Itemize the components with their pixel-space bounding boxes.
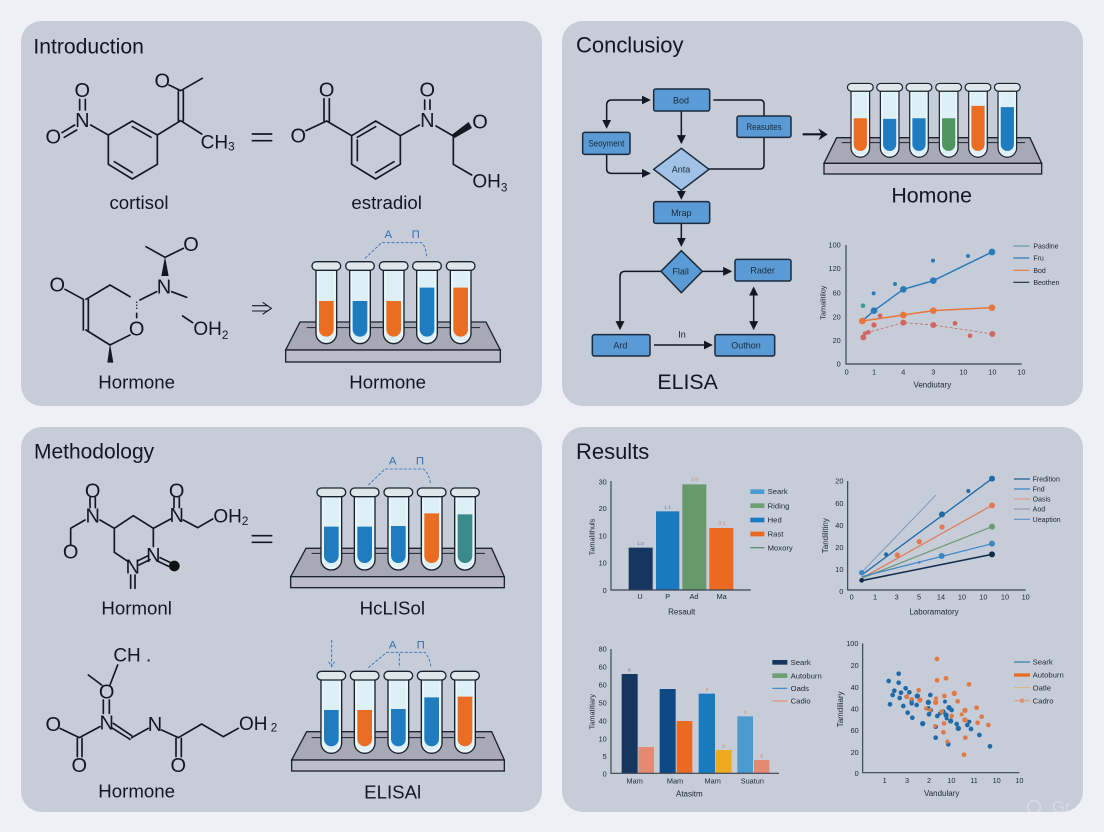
line chart: laboratory: 10 xyxy=(1022,593,1030,602)
dashed annotation: A xyxy=(389,455,397,467)
bar chart: results: 1.0 xyxy=(637,541,644,547)
molecule: estradiol: OH xyxy=(472,171,501,192)
line chart: 20 xyxy=(833,312,841,321)
heading: Introduction: Introduction xyxy=(33,35,144,58)
molecule: hormone: O xyxy=(46,714,61,736)
scatter plot: 20 xyxy=(851,661,859,670)
line chart: laboratory: Tandilitiny xyxy=(821,518,830,553)
scatter plot: 60 xyxy=(851,726,859,735)
dashed annotation: Π xyxy=(416,455,424,467)
bar chart: results: 1.1 xyxy=(664,504,671,510)
molecule: cortisol xyxy=(46,71,235,179)
grouped bar chart: 60 xyxy=(599,663,607,672)
grouped bar chart: Autoburn xyxy=(791,671,822,680)
bar chart: results: Rast xyxy=(768,530,784,539)
bar chart: results: Hed xyxy=(768,516,782,525)
dashed annotation: A xyxy=(385,229,393,241)
label: estradiol: estradiol xyxy=(351,192,422,213)
flowchart: Bod xyxy=(673,95,689,105)
flowchart: Ard xyxy=(613,341,627,351)
bar chart: results xyxy=(587,477,793,616)
scatter plot: Oatle xyxy=(1033,684,1051,693)
molecule: hormonl xyxy=(63,481,248,588)
line chart: laboratory: 20 xyxy=(835,477,843,486)
bar chart: results: U xyxy=(637,592,643,601)
flowchart xyxy=(583,89,791,356)
flowchart: Anta xyxy=(672,164,690,174)
line chart xyxy=(818,241,1059,390)
bar chart: results: Ma xyxy=(717,592,728,601)
scatter plot: 100 xyxy=(846,639,858,648)
molecule: hormone: N xyxy=(99,713,114,735)
molecule: hormone: O xyxy=(99,682,114,704)
grouped bar chart: 50 xyxy=(599,698,607,707)
line chart: laboratory: 3 xyxy=(895,593,899,602)
grouped bar chart: 5 xyxy=(603,752,607,761)
label: ELISA: ELISA xyxy=(657,370,719,394)
molecule: hormonl: OH xyxy=(213,506,242,527)
bar chart: results: 0 xyxy=(603,586,607,595)
scatter plot: Seark xyxy=(1033,658,1053,667)
label: hormone left: Hormone xyxy=(98,371,175,392)
panel: results xyxy=(562,427,1083,817)
line chart: Fru xyxy=(1033,256,1044,263)
flowchart: In xyxy=(678,329,686,339)
grouped bar chart: Suatun xyxy=(741,777,764,786)
molecule: hormonl: 2 xyxy=(242,515,248,528)
flowchart: Mrap xyxy=(671,208,692,218)
scatter plot: 3 xyxy=(905,776,909,785)
grouped bar chart: 60 xyxy=(599,681,607,690)
label: cortisol: cortisol xyxy=(109,192,169,213)
grouped bar chart: Seark xyxy=(791,658,811,667)
scatter plot: 20 xyxy=(851,748,859,757)
line chart: Beothen xyxy=(1033,280,1059,287)
line chart: laboratory: 40 xyxy=(835,521,843,530)
bar chart: results: P xyxy=(665,592,670,601)
label: hormone right: Hormone xyxy=(349,371,426,392)
label: ELISAl: ELISAl xyxy=(364,781,421,802)
arrow: double xyxy=(252,302,271,314)
molecule: hormonl: N xyxy=(125,557,140,579)
grouped bar chart: 40 xyxy=(599,716,607,725)
molecule: hormone: N xyxy=(157,277,171,299)
scatter plot: 11 xyxy=(970,776,978,785)
scatter plot: 2 xyxy=(927,776,931,785)
equals sign xyxy=(252,134,272,141)
molecule: estradiol: O xyxy=(319,79,334,101)
molecule: hormonl: N xyxy=(85,506,100,528)
molecule: cortisol: O xyxy=(75,80,90,102)
dashed annotation with arrow: A xyxy=(389,639,397,651)
line chart: 0 xyxy=(837,360,841,369)
panel: methodology xyxy=(21,427,542,812)
dashed annotation with arrow: Π xyxy=(417,639,425,651)
molecule: hormone: O xyxy=(183,234,199,256)
grouped bar chart: Mam xyxy=(667,777,683,786)
line chart: laboratory: 10 xyxy=(958,593,966,602)
line chart: 120 xyxy=(829,264,841,273)
line chart: laboratory: 0 xyxy=(839,587,843,596)
line chart: laboratory: 60 xyxy=(835,499,843,508)
flowchart: Rader xyxy=(750,266,775,276)
scatter plot: Vandulary xyxy=(924,789,959,798)
molecule: hormonl: O xyxy=(85,481,100,503)
bar chart: results: 30 xyxy=(599,477,607,486)
line chart: laboratory: 0 xyxy=(850,593,854,602)
label: Hormonl: Hormonl xyxy=(101,597,172,618)
line chart: 3 xyxy=(931,368,935,377)
grouped bar chart: 9 xyxy=(744,710,747,716)
line chart: 4 xyxy=(901,368,905,377)
grouped bar chart: Oads xyxy=(791,684,809,693)
molecule: hormone: CH . xyxy=(113,646,151,667)
test tube rack xyxy=(824,83,1042,174)
flowchart: Flail xyxy=(672,266,689,276)
test tube rack top xyxy=(291,488,504,588)
grouped bar chart: 6 xyxy=(706,687,709,693)
line chart: laboratory: 14 xyxy=(937,593,945,602)
line chart: laboratory: Laboramatory xyxy=(909,607,959,616)
scatter plot xyxy=(836,639,1064,798)
line chart: laboratory: Ueaption xyxy=(1033,517,1061,524)
dashed annotation with arrow xyxy=(329,639,431,668)
molecule: estradiol: 3 xyxy=(501,181,507,194)
grouped bar chart: 0 xyxy=(603,770,607,779)
molecule: cortisol: 3 xyxy=(228,140,235,153)
molecule: hormone: O xyxy=(72,755,87,777)
grouped bar chart: 8 xyxy=(722,743,725,749)
heading: Conclusioy: Conclusioy xyxy=(576,33,684,58)
line chart: laboratory xyxy=(821,476,1061,616)
molecule: estradiol: N xyxy=(420,110,435,132)
line chart: laboratory: Oasis xyxy=(1033,497,1051,504)
line chart: laboratory: 10 xyxy=(1001,593,1009,602)
line chart: laboratory: 1 xyxy=(873,593,877,602)
heading: Methodology: Methodology xyxy=(34,440,155,463)
scatter plot: Autoburn xyxy=(1033,671,1064,680)
flowchart: Seoyment xyxy=(588,138,625,148)
scatter plot: Cadro xyxy=(1033,696,1054,705)
line chart: 10 xyxy=(1017,368,1025,377)
flowchart: Outhon xyxy=(731,341,761,351)
molecule: hormone xyxy=(46,646,277,777)
bar chart: results: Tamalithuls xyxy=(587,518,596,555)
molecule: hormone: 2 xyxy=(267,721,277,734)
label: Hormone: Hormone xyxy=(98,780,175,801)
grouped bar chart: Mam xyxy=(627,777,643,786)
grouped bar chart: Cadio xyxy=(791,697,811,706)
line chart: 100 xyxy=(829,241,841,250)
molecule: estradiol xyxy=(291,79,507,194)
test tube rack xyxy=(286,262,500,362)
bar chart: results: Seark xyxy=(768,487,788,496)
molecule: cortisol: O xyxy=(155,71,170,93)
molecule: estradiol: O xyxy=(420,79,435,101)
line chart: 10 xyxy=(959,368,967,377)
grouped bar chart: 80 xyxy=(599,645,607,654)
molecule: estradiol: O xyxy=(472,112,488,134)
line chart: 0 xyxy=(845,368,849,377)
molecule: hormonl: O xyxy=(169,481,184,503)
arrow to test tubes xyxy=(803,128,828,140)
molecule: hormone xyxy=(50,234,228,363)
line chart: laboratory: 10 xyxy=(979,593,987,602)
line chart: Bod xyxy=(1033,268,1046,275)
molecule: cortisol: CH xyxy=(201,132,228,153)
scatter plot: 0 xyxy=(855,769,859,778)
line chart: 10 xyxy=(988,368,996,377)
test tube rack bottom xyxy=(292,671,504,771)
line chart: Tamalitiloy xyxy=(818,285,827,320)
bar chart: results: 10 xyxy=(599,531,607,540)
molecule: cortisol: N xyxy=(75,110,90,132)
molecule: hormonl: N xyxy=(146,545,161,567)
scatter plot: 40 xyxy=(851,683,859,692)
scatter plot: 40 xyxy=(851,704,859,713)
dashed annotation: Π xyxy=(412,229,420,241)
panel: introduction xyxy=(21,21,542,406)
line chart: 60 xyxy=(833,288,841,297)
molecule: hormone: O xyxy=(171,755,186,777)
scatter plot: 10 xyxy=(993,776,1001,785)
bar chart: results: Moxory xyxy=(768,544,793,553)
line chart: Pasdine xyxy=(1033,244,1059,251)
watermark xyxy=(1028,798,1071,817)
grouped bar chart xyxy=(588,645,822,799)
label: HcLISol: HcLISol xyxy=(360,597,425,618)
scatter plot: Tamdiliary xyxy=(836,691,845,727)
dashed annotation xyxy=(365,229,427,258)
molecule: hormone: O xyxy=(129,319,144,341)
molecule: hormonl: O xyxy=(63,542,78,564)
molecule: estradiol: O xyxy=(291,126,306,148)
line chart: laboratory: 20 xyxy=(835,543,843,552)
dashed annotation xyxy=(368,455,431,485)
panel: conclusion xyxy=(562,21,1083,406)
bar chart: results: Riding xyxy=(768,501,789,510)
line chart: 1 xyxy=(872,368,876,377)
molecule: hormone: OH xyxy=(193,319,222,340)
line chart: laboratory: 10 xyxy=(835,565,843,574)
line chart: laboratory: Aod xyxy=(1033,507,1045,514)
grouped bar chart: 10 xyxy=(599,734,607,743)
molecule: hormone: OH xyxy=(239,714,267,735)
bar chart: results: 2.0 xyxy=(691,477,698,483)
grouped bar chart: 6 xyxy=(760,753,763,759)
grouped bar chart: Mam xyxy=(705,777,721,786)
line chart: 20 xyxy=(833,336,841,345)
bar chart: results: 10 xyxy=(599,559,607,568)
flowchart: Reasuites xyxy=(746,122,782,132)
molecule: hormonl: N xyxy=(169,505,184,527)
line chart: laboratory: Fnd xyxy=(1033,487,1045,494)
bar chart: results: Ad xyxy=(690,592,698,601)
molecule: cortisol: O xyxy=(46,127,61,149)
bar chart: results: Resault xyxy=(668,607,696,616)
bar chart: results: 3.1 xyxy=(719,520,726,526)
molecule: hormone: N xyxy=(148,714,162,736)
scatter plot: 1 xyxy=(883,776,887,785)
scatter plot: 10 xyxy=(1015,776,1023,785)
watermark: Gr xyxy=(1052,798,1071,817)
line chart: laboratory: 5 xyxy=(917,593,921,602)
scatter plot: 10 xyxy=(947,776,955,785)
grouped bar chart: Atasitm xyxy=(676,790,703,799)
label: Homone: Homone xyxy=(891,184,972,208)
line chart: laboratory: Fredition xyxy=(1033,477,1060,484)
grouped bar chart: Tamatitiary xyxy=(588,694,597,729)
line chart: Vendiutary xyxy=(913,381,951,390)
equals sign xyxy=(252,536,272,542)
molecule: hormone: O xyxy=(50,274,65,296)
molecule: hormone: 2 xyxy=(222,329,228,342)
heading: Results: Results xyxy=(576,439,649,464)
bar chart: results: 20 xyxy=(599,504,607,513)
grouped bar chart: 8 xyxy=(628,668,631,674)
